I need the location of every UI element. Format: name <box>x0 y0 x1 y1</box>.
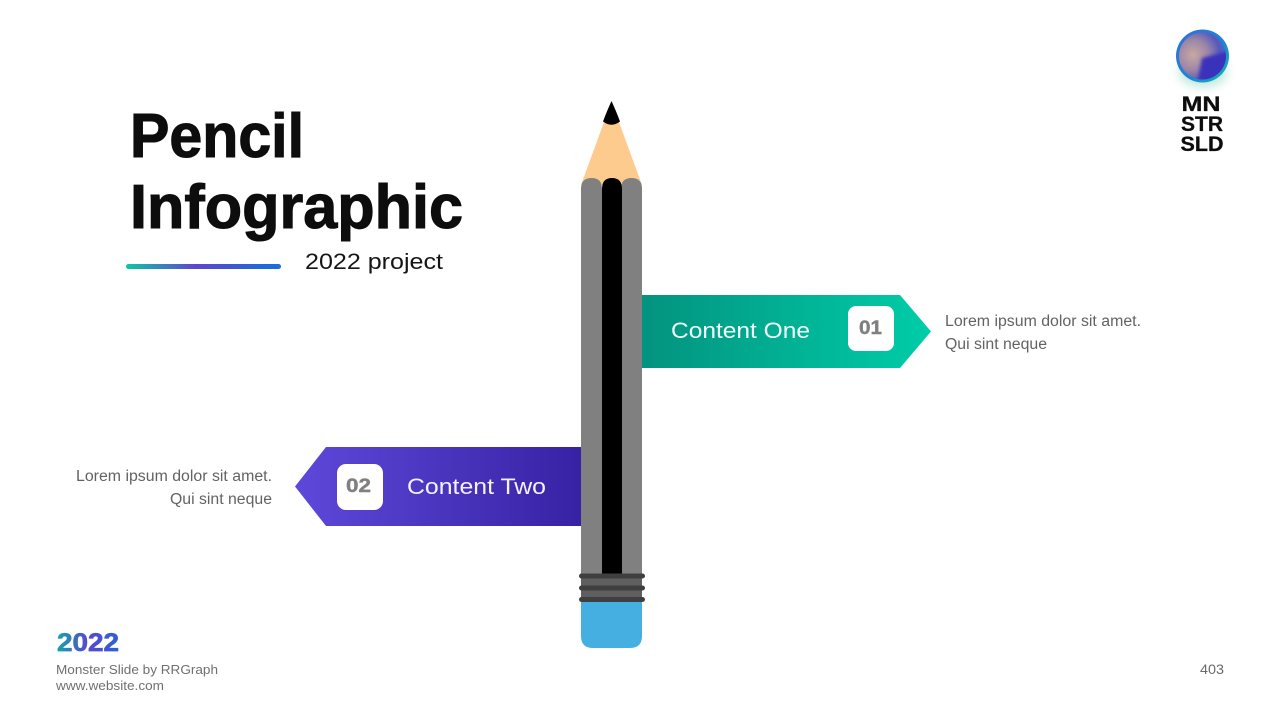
number badge 01 <box>848 306 894 351</box>
footer credits: www.website.com <box>55 678 164 693</box>
pencil <box>579 101 645 648</box>
description one <box>945 313 1141 353</box>
footer credits: Monster Slide by RRGraph <box>56 662 218 677</box>
number badge 02 <box>337 464 383 510</box>
description two <box>76 468 272 508</box>
arrow banner: content two <box>295 447 581 526</box>
description one: Qui sint neque <box>945 336 1047 353</box>
logo wordmark: STR <box>1181 112 1223 136</box>
arrow banner: content one <box>642 295 931 368</box>
footer year: 2022 <box>57 629 119 657</box>
footer credits <box>55 662 218 693</box>
pencil graphite point <box>603 101 620 125</box>
pencil eraser <box>581 600 642 648</box>
title: Infographic <box>130 173 463 242</box>
pencil body <box>581 178 642 576</box>
page number: 403 <box>1200 661 1224 677</box>
logo wordmark <box>1180 92 1224 156</box>
title underline accent <box>126 264 281 269</box>
title <box>130 102 463 242</box>
number badge 02: 02 <box>346 476 371 497</box>
logo sphere <box>1176 30 1232 87</box>
pencil wood tip <box>581 122 642 185</box>
logo wordmark: SLD <box>1180 132 1224 156</box>
description two: Lorem ipsum dolor sit amet. <box>76 468 272 485</box>
title: Pencil <box>130 102 304 171</box>
logo <box>1176 30 1232 156</box>
pencil ferrule <box>579 574 645 602</box>
logo wordmark: MN <box>1182 92 1220 116</box>
banner label two: Content Two <box>407 474 546 499</box>
description two: Qui sint neque <box>170 491 272 508</box>
description one: Lorem ipsum dolor sit amet. <box>945 313 1141 330</box>
subtitle: 2022 project <box>305 249 443 274</box>
number badge 01: 01 <box>859 318 882 339</box>
banner label one: Content One <box>671 318 810 343</box>
